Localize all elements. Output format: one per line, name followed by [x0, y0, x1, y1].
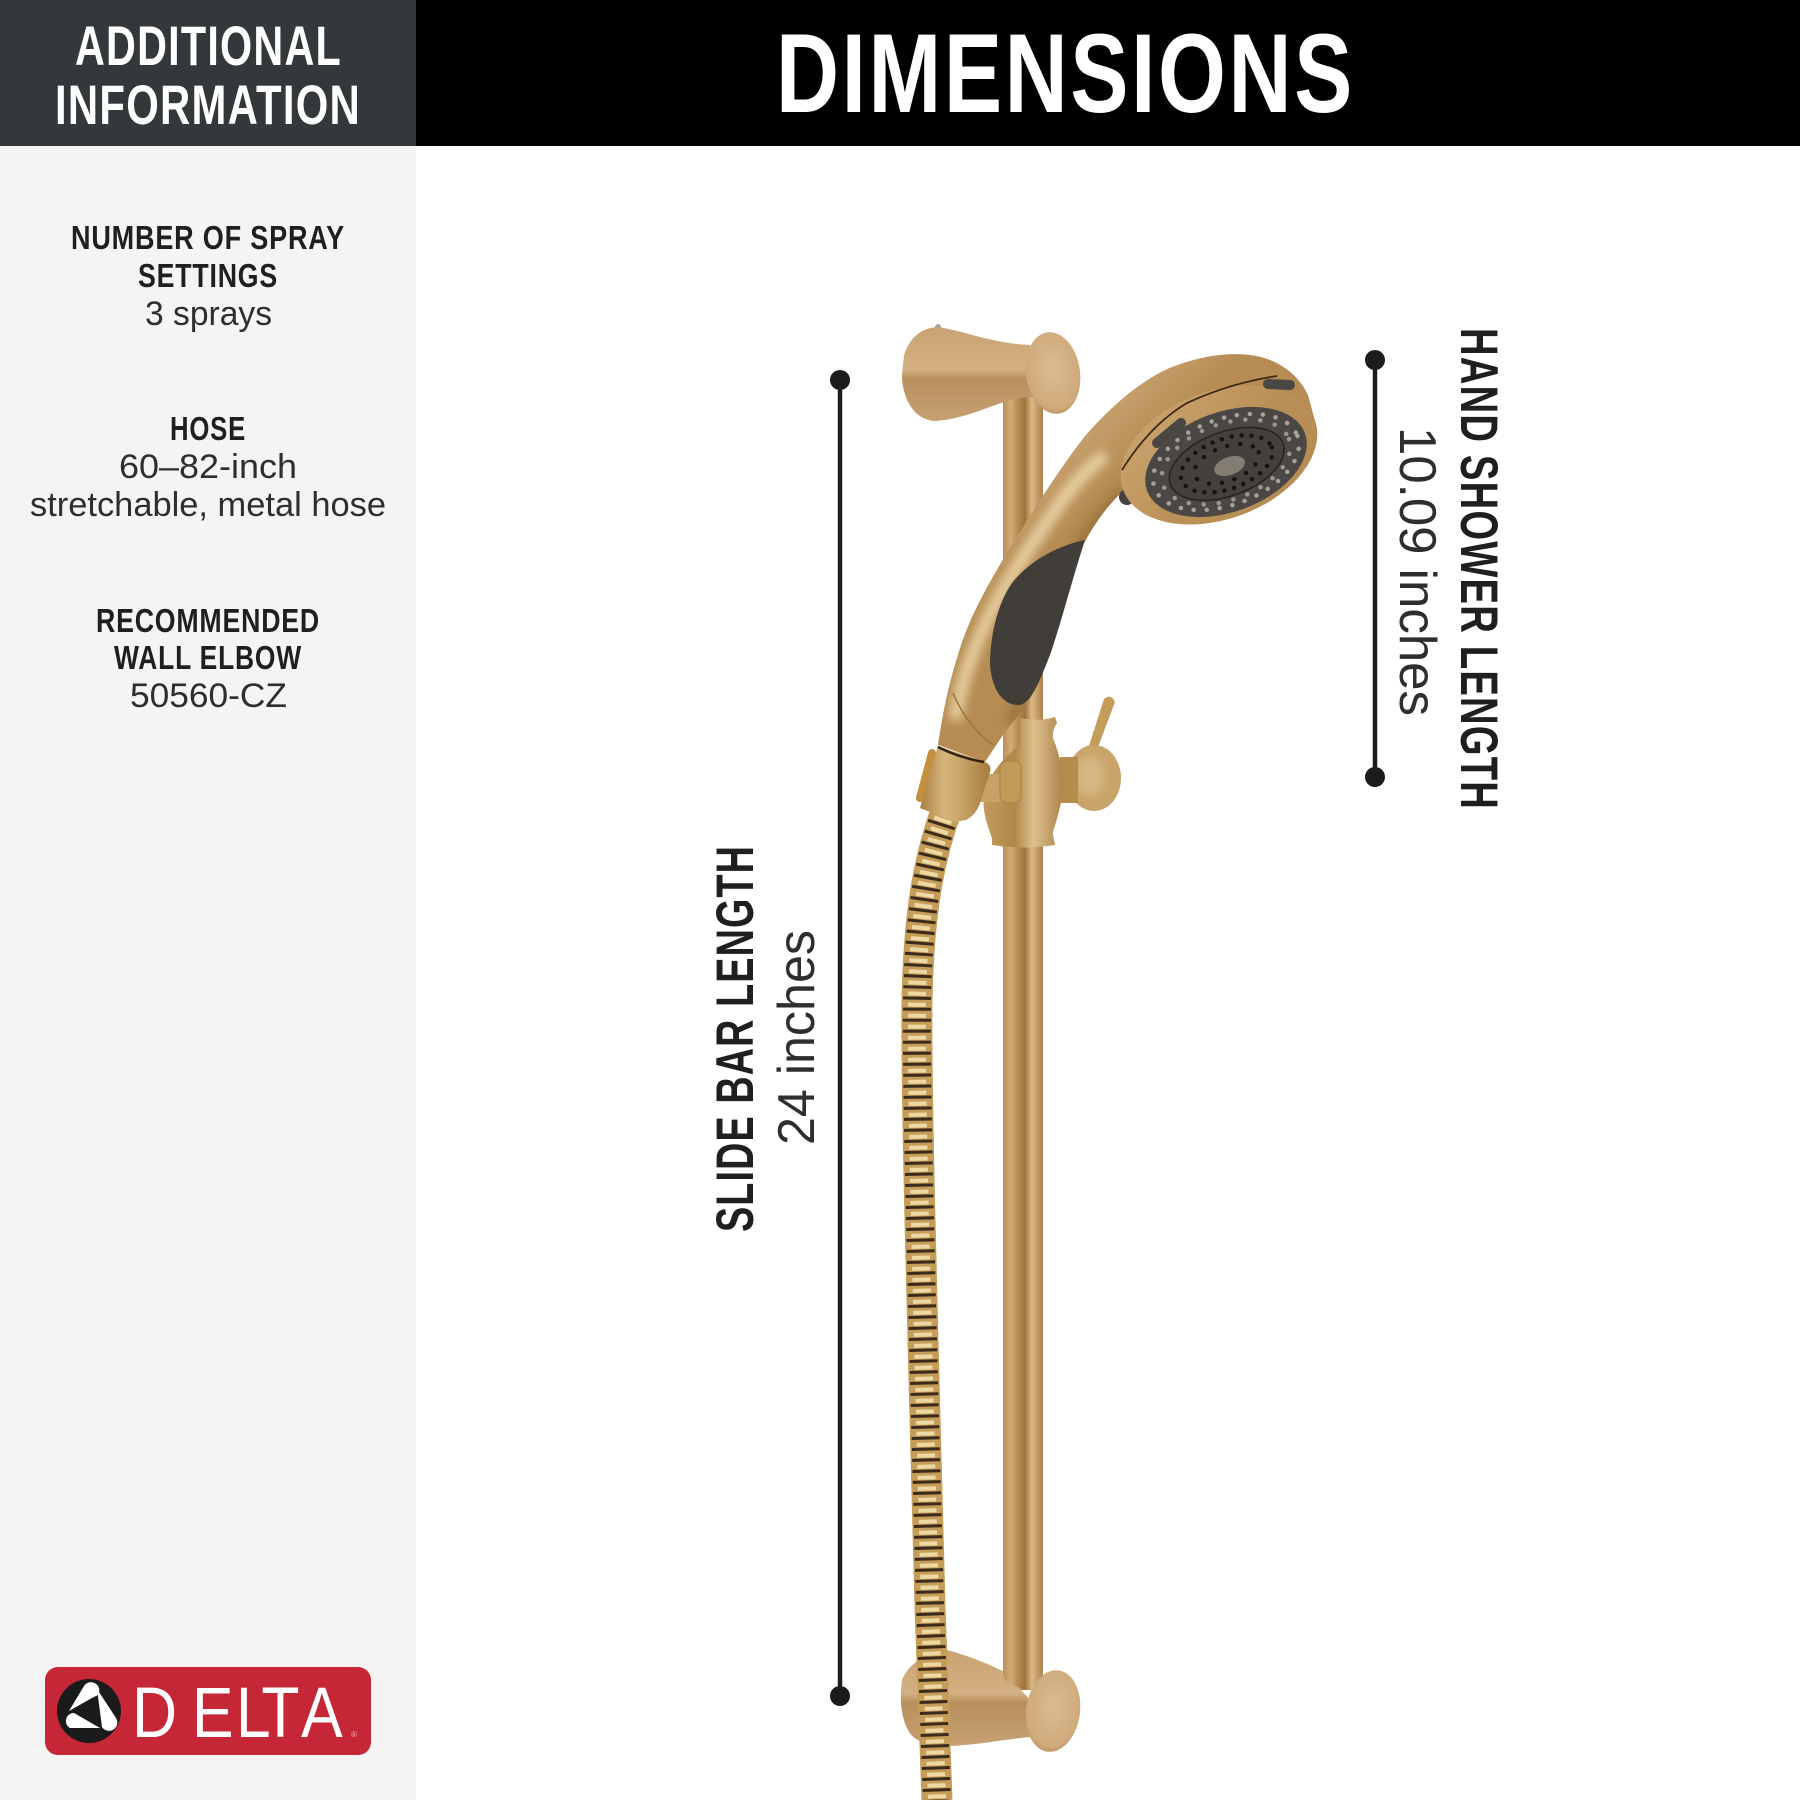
hose clip [920, 746, 990, 822]
text block: spray settings: SETTINGS [138, 257, 278, 294]
panel: additional information header: INFORMATION [55, 73, 361, 136]
text block: spray settings [71, 219, 345, 333]
text block: hose: HOSE [170, 410, 246, 447]
label: slide bar length: SLIDE BAR LENGTH [706, 845, 765, 1232]
text block: hose [30, 410, 386, 524]
text block: wall elbow [96, 602, 320, 715]
label: hand shower length: HAND SHOWER LENGTH [1449, 328, 1508, 810]
panel: dimensions title bar [416, 0, 1800, 146]
text block: wall elbow: WALL ELBOW [114, 639, 302, 676]
top bracket [902, 324, 1085, 421]
text block: spray settings: 3 sprays [145, 295, 272, 333]
text block: spray settings: NUMBER OF SPRAY [71, 219, 345, 256]
handle grip [990, 540, 1085, 705]
arrow: slide bar length dimension line [830, 370, 850, 1706]
panel: additional information header: ADDITIONAL [75, 14, 342, 77]
shower head [1101, 360, 1337, 550]
text block: wall elbow: 50560-CZ [130, 677, 287, 715]
icon: Delta logo: DELTA [132, 1673, 343, 1753]
arrow: hand shower length dimension line [1365, 350, 1385, 787]
panel: dimensions title bar: DIMENSIONS [776, 11, 1355, 136]
diverter body and lever [984, 697, 1121, 848]
hand shower handle [938, 354, 1315, 762]
label: 24 inches: 24 inches [768, 930, 826, 1145]
text block: hose: stretchable, metal hose [30, 486, 386, 524]
text block: hose: 60–82-inch [119, 448, 297, 486]
icon: Delta logo: ® [351, 1730, 357, 1739]
product: shower slide bar kit [901, 324, 1337, 1800]
bottom bracket [901, 1600, 1085, 1755]
text block: wall elbow: RECOMMENDED [96, 602, 320, 639]
icon: Delta logo [45, 1667, 371, 1755]
panel: additional information header [0, 0, 416, 146]
hose [917, 808, 947, 1800]
spray face [1130, 386, 1322, 538]
connector between clip and body [980, 761, 1021, 803]
panel: sidebar background [0, 146, 416, 1800]
slide bar [1003, 390, 1043, 1690]
label: 10.09 inches: 10.09 inches [1388, 427, 1446, 716]
